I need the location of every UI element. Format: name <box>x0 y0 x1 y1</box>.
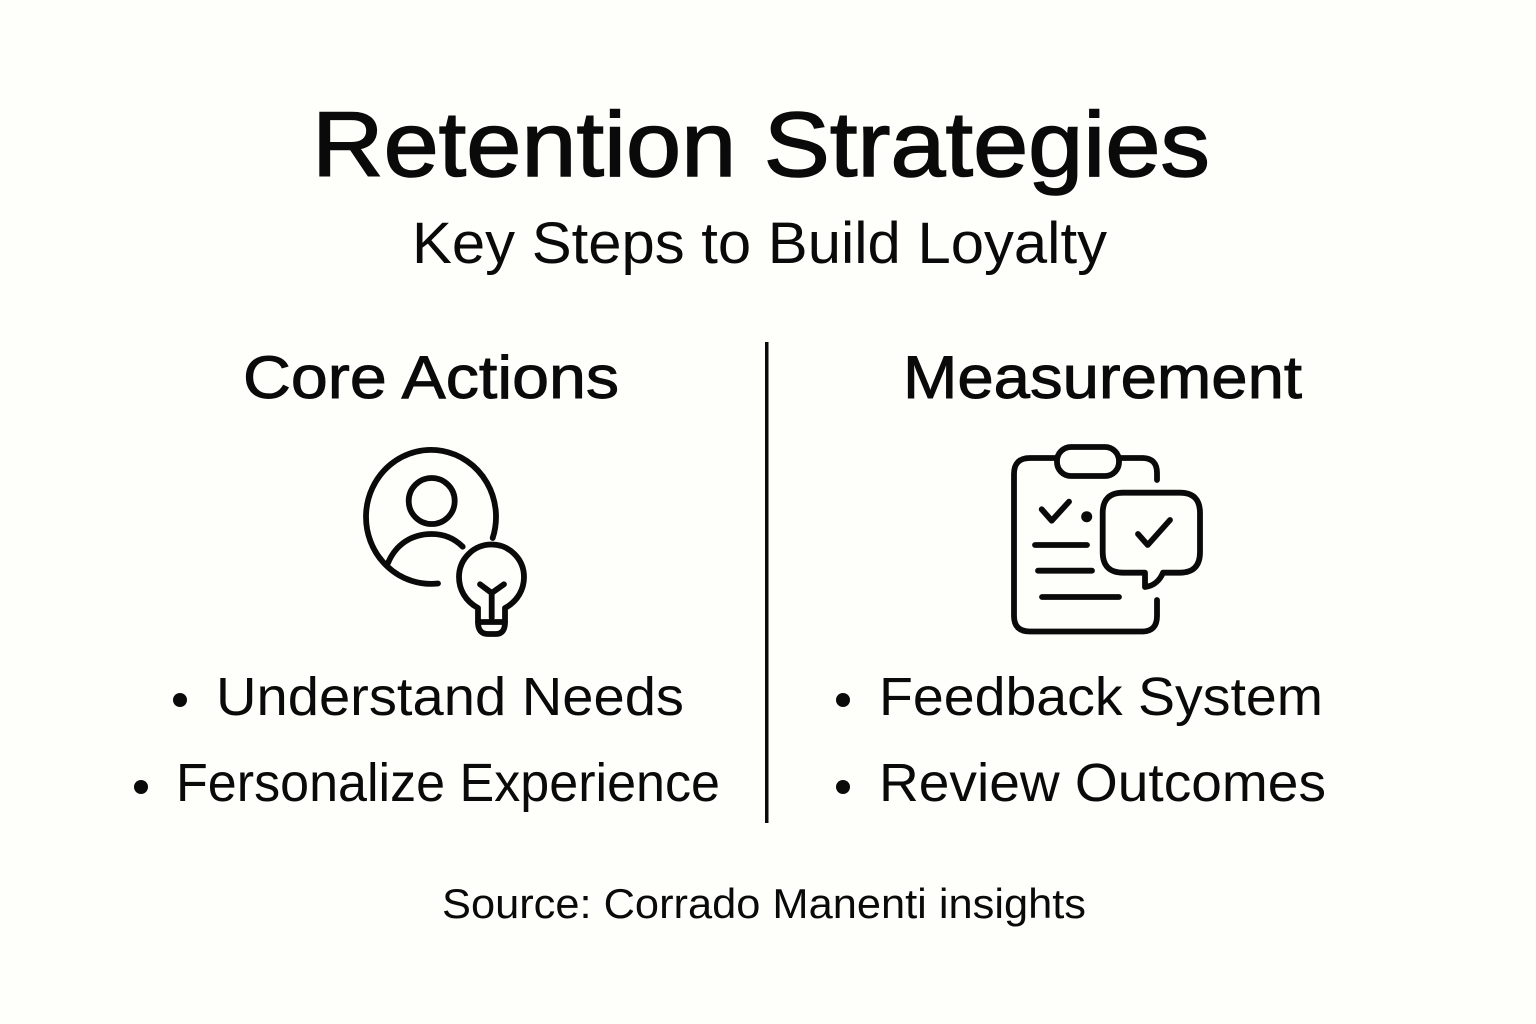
bullet item: understand needs: Understand Needs <box>216 667 684 727</box>
icon: clipboard with speech bubble <box>1014 447 1200 632</box>
icon: person with lightbulb <box>366 450 524 634</box>
heading: core actions: Core Actions <box>243 344 619 411</box>
bullet item: review outcomes: Review Outcomes <box>879 753 1326 813</box>
panel: measurement <box>836 344 1326 813</box>
list: measurement <box>836 667 1326 813</box>
bullet item: personalize experience: Fersonalize Experience <box>176 753 720 813</box>
panel: core actions <box>134 344 720 813</box>
source note: Source: Corrado Manenti insights <box>442 880 1086 927</box>
heading: measurement: Measurement <box>903 344 1302 411</box>
list: core actions <box>134 667 720 813</box>
vertical divider <box>765 342 768 823</box>
bullet item: feedback system: Feedback System <box>879 667 1323 727</box>
title: Retention Strategies <box>312 94 1210 196</box>
subtitle: Key Steps to Build Loyalty <box>412 211 1107 276</box>
